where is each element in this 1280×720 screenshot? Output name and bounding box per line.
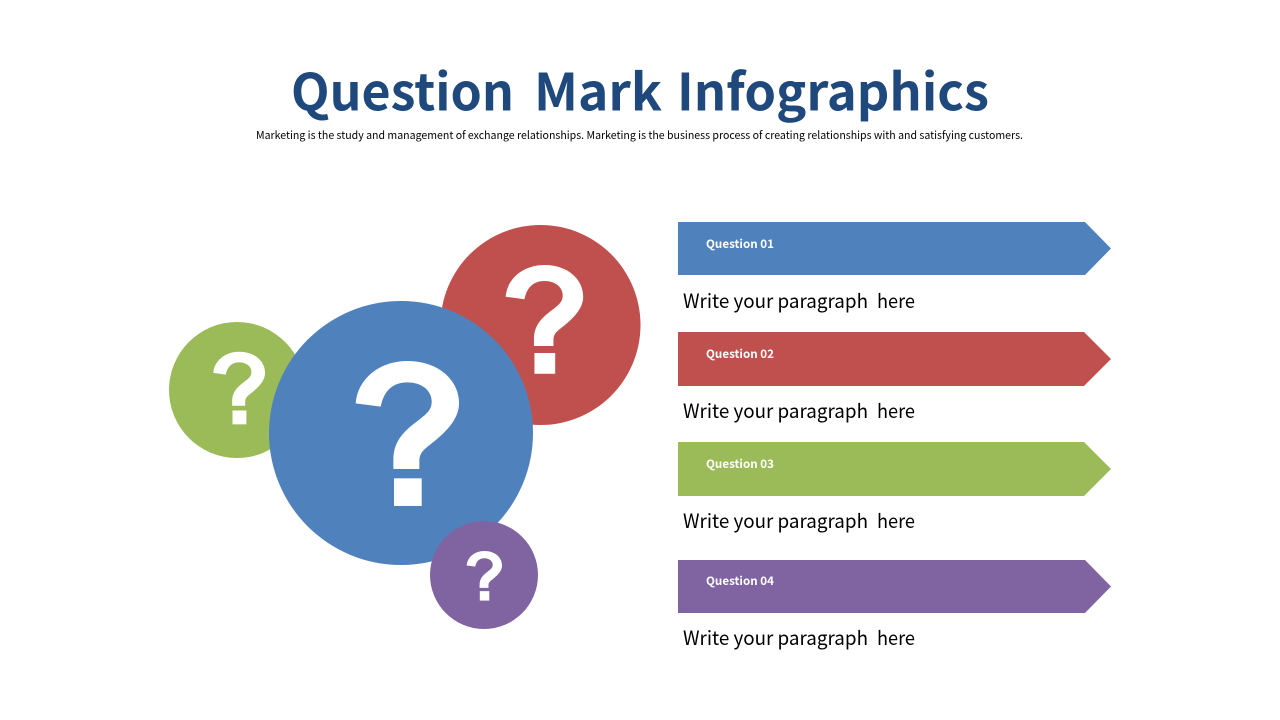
label: question 01: Question 01 [706,236,774,252]
title: Infographics [677,52,989,126]
icon: blue question circle [269,301,533,565]
paragraph: question 01: Write your paragraph [683,285,868,314]
paragraph: question 04: here [877,622,915,651]
paragraph: question 02: Write your paragraph [683,395,868,424]
subtitle: Marketing is the study and management of exchange relationships. Marketing is the business process of creating relationships with and satisfying customers. [256,127,1023,143]
panel: question 04 [678,560,1111,651]
panel: question 01 [678,222,1111,314]
icon: green question circle [169,322,305,458]
paragraph: question 03: Write your paragraph [683,505,868,534]
paragraph: question 02: here [877,395,915,424]
title: Mark [534,52,662,126]
arrow banner: question 04 [678,560,1111,613]
panel: question 03 [678,442,1111,534]
title: Question [291,52,514,126]
paragraph: question 03: here [877,505,915,534]
arrow banner: question 03 [678,442,1111,496]
arrow banner: question 01 [678,222,1111,275]
paragraph: question 01: here [877,285,915,314]
paragraph: question 04: Write your paragraph [683,622,868,651]
label: question 03: Question 03 [706,456,774,472]
panel: question 02 [678,332,1111,424]
icon: red question circle [440,225,640,425]
icon: purple question circle [430,521,538,629]
label: question 04: Question 04 [706,573,774,589]
label: question 02: Question 02 [706,346,774,362]
arrow banner: question 02 [678,332,1111,386]
question mark circle cluster [169,225,640,629]
